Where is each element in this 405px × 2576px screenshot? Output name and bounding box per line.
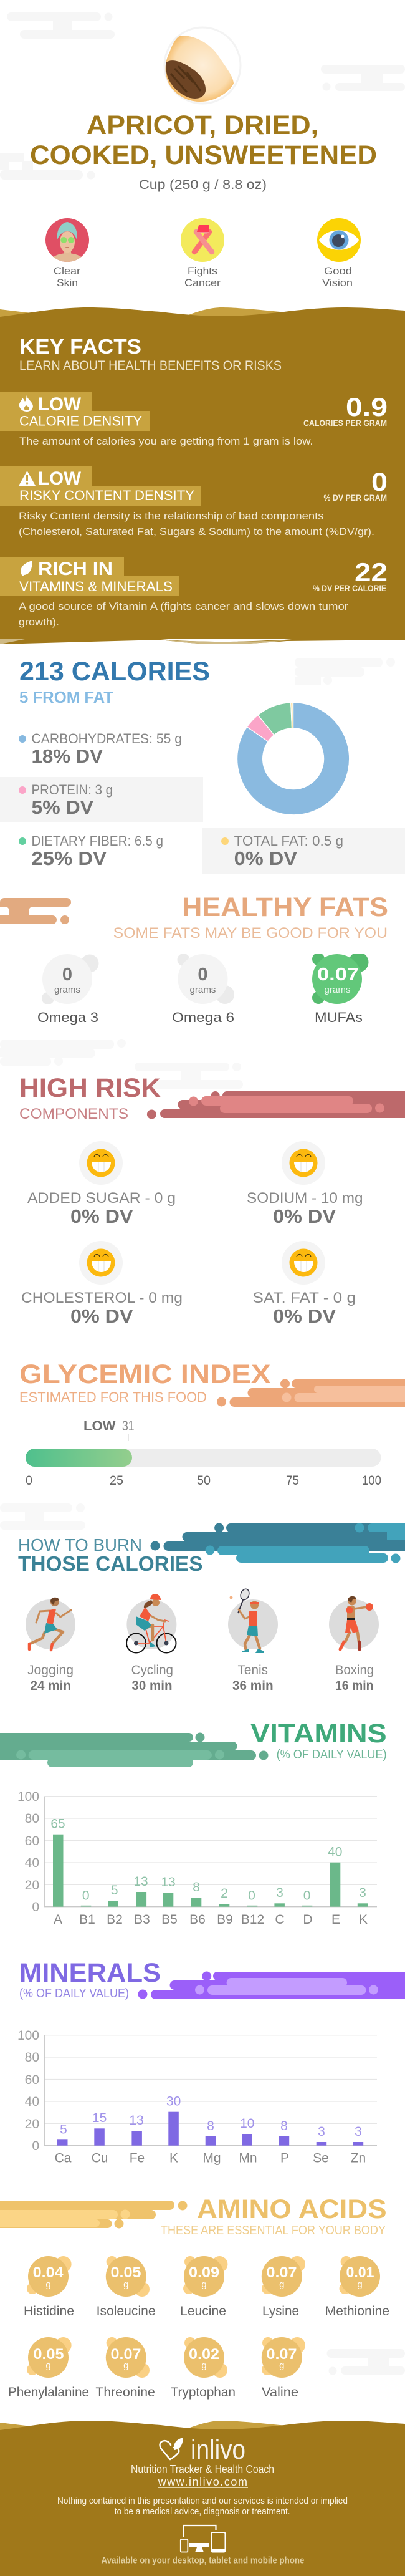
cloud: minerals [138, 1972, 405, 1999]
amino: tryptophan: g [201, 2360, 207, 2371]
heading: how to burn: THOSE CALORIES [18, 1552, 203, 1575]
activity: jogging [26, 1598, 75, 1693]
availability note: Available on your desktop, tablet and mobile phone [101, 2555, 304, 2566]
bar chart: minerals: Mg [202, 2151, 221, 2166]
item: saturated fat: SAT. FAT - 0 g [253, 1290, 356, 1306]
bar chart: vitamins: B9 [217, 1913, 233, 1927]
bar chart: vitamins: 8 [193, 1880, 200, 1894]
amino: phenylalanine: Phenylalanine [8, 2385, 89, 2400]
cloud: vitamins [0, 1732, 268, 1767]
legend: protein [19, 782, 113, 818]
heading: how to burn [18, 1535, 203, 1575]
panel: glycemic index [19, 1359, 405, 1488]
bar chart: vitamins [17, 1790, 377, 1927]
heading: vitamins: VITAMINS [250, 1719, 387, 1749]
amino: leucine: 0.09 [189, 2264, 219, 2281]
heading: healthy fats: HEALTHY FATS [182, 892, 388, 922]
amino: tryptophan: 0.02 [189, 2346, 219, 2363]
heading: calories [19, 657, 210, 707]
amino: methionine: Methionine [325, 2304, 389, 2318]
food photo: dried apricot [164, 27, 241, 104]
panel: high risk [19, 1073, 405, 1327]
item: cholesterol: CHOLESTEROL - 0 mg [21, 1290, 183, 1306]
bar chart: vitamins: 0 [82, 1889, 90, 1903]
bar chart: vitamins: 40 [25, 1856, 39, 1870]
amino: lysine: 0.07 [267, 2264, 297, 2281]
activity: cycling [126, 1594, 176, 1693]
bar chart: vitamins: 0 [32, 1900, 39, 1914]
cloud: healthy fats [0, 898, 72, 924]
bar chart: vitamins: E [331, 1913, 340, 1927]
bar chart: minerals: 20 [25, 2117, 39, 2131]
fact: calorie density: CALORIES PER GRAM [303, 418, 387, 428]
bar chart: vitamins: 80 [25, 1811, 39, 1826]
heading: high risk: COMPONENTS [19, 1106, 128, 1122]
amino: valine: Valine [262, 2385, 298, 2400]
bar chart: vitamins: 5 [111, 1883, 118, 1898]
bar chart: vitamins: B5 [161, 1913, 178, 1927]
item: saturated fat [253, 1241, 356, 1327]
benefit: good vision [317, 218, 361, 289]
amino: threonine [95, 2337, 155, 2400]
donut chart [237, 703, 350, 815]
decorative cloud burn [0, 1503, 85, 1530]
bar chart: minerals: P [280, 2151, 289, 2166]
serving size: Cup (250 g / 8.8 oz) [139, 178, 267, 192]
stat: omega 6: Omega 6 [172, 1010, 234, 1025]
decorative clouds mid [0, 1039, 243, 1089]
tagline: Nutrition Tracker & Health Coach [131, 2463, 274, 2476]
label: tenis: 36 min [232, 1679, 274, 1693]
bar chart: minerals: K [169, 2151, 178, 2166]
bar chart: minerals: Ca [55, 2151, 72, 2166]
fact: vitamins and minerals: A good source of Vitamin A (fights cancer and slows down tumor [19, 601, 348, 612]
amino: phenylalanine: g [45, 2360, 51, 2371]
panel: calories [0, 657, 405, 874]
panel: amino acids [0, 2194, 405, 2400]
bar chart: vitamins: 3 [359, 1886, 366, 1900]
fact: vitamins and minerals: VITAMINS & MINERALS [19, 579, 173, 594]
fact: calorie density: LOW [38, 394, 82, 415]
amino: threonine: g [123, 2360, 128, 2371]
legend: total fat: 0% DV [234, 847, 297, 869]
fact: vitamins and minerals: % DV PER CALORIE [313, 584, 386, 593]
bar chart: vitamins: 60 [25, 1834, 39, 1848]
fact: vitamins and minerals [0, 557, 388, 628]
fact: risky content density: (Cholesterol, Saturated Fat, Sugars & Sodium) to the amount (%DV/gr). [19, 526, 374, 538]
heading: high risk [19, 1073, 161, 1122]
bar chart: minerals: 5 [60, 2123, 67, 2137]
icon: devices [181, 2525, 226, 2552]
label: jogging [27, 1663, 74, 1693]
item: sodium: SODIUM - 10 mg [247, 1190, 363, 1207]
gauge scale: 75 [286, 1474, 299, 1488]
label: boxing: Boxing [335, 1663, 374, 1677]
legend: dietary fiber: DIETARY FIBER: 6.5 g [31, 833, 163, 849]
heading: calories: 5 FROM FAT [19, 688, 113, 707]
bar chart: minerals: 40 [25, 2095, 39, 2109]
gauge scale: 50 [197, 1474, 211, 1488]
bar chart: vitamins: B12 [241, 1913, 264, 1927]
item: cholesterol: 0% DV [70, 1305, 133, 1327]
bar chart: minerals: 8 [207, 2119, 214, 2133]
item: added sugar: ADDED SUGAR - 0 g [27, 1190, 176, 1207]
label: cycling: Cycling [131, 1663, 173, 1677]
fact: risky content density: RISKY CONTENT DENSITY [19, 488, 194, 503]
bar chart: vitamins: 13 [161, 1875, 176, 1889]
bar chart: minerals: Mn [239, 2151, 257, 2166]
benefit: fights cancer: Fights [188, 265, 217, 277]
bar chart: minerals: 30 [166, 2095, 181, 2109]
gauge scale: 100 [362, 1474, 381, 1488]
amino: lysine: Lysine [262, 2304, 299, 2318]
item: saturated fat: 0% DV [273, 1305, 336, 1327]
stat: omega 3: Omega 3 [37, 1010, 98, 1025]
label: boxing [335, 1663, 374, 1693]
label: tenis: Tenis [238, 1663, 268, 1677]
bar chart: minerals: Se [313, 2151, 329, 2166]
amino: valine: g [279, 2360, 284, 2371]
legend: carbohydrates [19, 731, 182, 767]
heading: vitamins: (% OF DAILY VALUE) [277, 1748, 387, 1762]
gauge label: 31 [122, 1418, 135, 1434]
legend: carbohydrates: 18% DV [31, 745, 103, 767]
label: cycling: 30 min [132, 1679, 172, 1693]
heading: key facts: KEY FACTS [19, 335, 141, 358]
heading: glycemic index: GLYCEMIC INDEX [19, 1359, 271, 1389]
stat: MUFAs: 0.07 [317, 965, 359, 985]
stat: omega 3 [37, 954, 98, 1025]
bar chart: vitamins: 0 [303, 1889, 310, 1903]
amino: methionine: 0.01 [346, 2264, 374, 2281]
fact: risky content density: 0 [371, 467, 388, 496]
item: cholesterol [21, 1241, 183, 1327]
label: jogging: Jogging [27, 1663, 74, 1677]
heading: healthy fats: SOME FATS MAY BE GOOD FOR YOU [113, 925, 388, 942]
heading: minerals: (% OF DAILY VALUE) [19, 1987, 129, 2000]
amino: isoleucine [97, 2256, 156, 2318]
macro panels [0, 777, 405, 874]
amino: isoleucine: 0.05 [111, 2264, 141, 2281]
bar chart: vitamins: C [275, 1913, 285, 1927]
amino: histidine: g [45, 2279, 51, 2290]
fact: vitamins and minerals: growth). [19, 616, 59, 628]
bar chart: vitamins: 2 [221, 1886, 228, 1901]
bar chart: vitamins: 0 [248, 1889, 255, 1903]
heading: calories: 213 CALORIES [19, 657, 210, 687]
heading: key facts: LEARN ABOUT HEALTH BENEFITS OR RISKS [19, 359, 282, 373]
amino: leucine: Leucine [180, 2304, 226, 2318]
cloud: high risk [147, 1091, 405, 1119]
amino: histidine: Histidine [24, 2304, 74, 2318]
amino: lysine [262, 2256, 305, 2318]
panel: vitamins [0, 1719, 387, 1927]
bar chart: minerals: 3 [318, 2125, 325, 2139]
heading: minerals [19, 1958, 161, 2000]
gauge scale [26, 1474, 381, 1488]
bar chart: minerals: 80 [25, 2050, 39, 2065]
stat: omega 3: grams [54, 985, 80, 995]
fact: calorie density: 0.9 [346, 392, 388, 422]
amino: methionine [325, 2256, 389, 2318]
heading: how to burn: HOW TO BURN [18, 1535, 142, 1555]
bar chart: vitamins: 20 [25, 1878, 39, 1893]
fact: calorie density: The amount of calories you are getting from 1 gram is low. [19, 435, 313, 447]
gauge label [83, 1418, 135, 1441]
legend: carbohydrates: CARBOHYDRATES: 55 g [31, 731, 182, 746]
amino: lysine: g [279, 2279, 284, 2290]
gauge label: LOW [83, 1418, 116, 1434]
item: sodium [247, 1141, 363, 1227]
legend: total fat [221, 833, 343, 869]
amino: isoleucine: g [123, 2279, 128, 2290]
stat: MUFAs: grams [324, 985, 350, 995]
decorative cloud amino [326, 2349, 405, 2375]
bar chart: vitamins: 13 [133, 1874, 148, 1889]
heading: glycemic index: ESTIMATED FOR THIS FOOD [19, 1389, 207, 1405]
stat: omega 3: 0 [62, 965, 72, 985]
heading: vitamins [250, 1719, 387, 1762]
fact: risky content density: LOW [38, 468, 82, 489]
heading: minerals: MINERALS [19, 1958, 161, 1988]
bar chart: vitamins: 40 [328, 1845, 342, 1860]
amino: histidine [24, 2256, 74, 2318]
disclaimer: Nothing contained in this presentation and our services is intended or implied [57, 2496, 348, 2506]
stat: omega 6: grams [189, 985, 216, 995]
amino: threonine: Threonine [95, 2385, 155, 2400]
amino: phenylalanine [8, 2337, 89, 2400]
heading: amino acids [161, 2194, 387, 2237]
bar chart: vitamins: B2 [107, 1913, 123, 1927]
bar chart: vitamins: B6 [189, 1913, 206, 1927]
cloud: glycemic index [217, 1379, 405, 1407]
item: sodium: 0% DV [273, 1205, 336, 1227]
bar chart: minerals: 10 [240, 2116, 254, 2131]
legend: protein: 5% DV [31, 796, 93, 818]
benefit: clear skin [45, 218, 89, 289]
stat: omega 6: 0 [198, 965, 208, 985]
item: added sugar: 0% DV [70, 1205, 133, 1227]
title: COOKED, UNSWEETENED [30, 140, 377, 170]
fact: risky content density: % DV PER GRAM [324, 493, 387, 503]
legend: dietary fiber: 25% DV [31, 847, 107, 869]
stat: MUFAs: MUFAs [315, 1010, 363, 1025]
bar chart: vitamins: 3 [276, 1886, 284, 1900]
benefit: clear skin: Clear [54, 265, 80, 277]
title: APRICOT, DRIED, [87, 110, 318, 140]
bar chart: vitamins: A [54, 1913, 62, 1927]
amino: tryptophan: Tryptophan [171, 2385, 236, 2400]
disclaimer: to be a medical advice, diagnosis or treatment. [115, 2506, 290, 2517]
fact: vitamins and minerals: 22 [355, 557, 388, 587]
bar chart: minerals: 100 [17, 2028, 39, 2043]
logo: inlivo [160, 2434, 245, 2465]
amino: valine [262, 2337, 305, 2400]
disclaimer [57, 2496, 348, 2517]
amino: histidine: 0.04 [33, 2264, 64, 2281]
decorative clouds header [0, 12, 405, 180]
label: jogging: 24 min [30, 1679, 71, 1693]
label: tenis [232, 1663, 274, 1693]
stat: MUFAs [312, 952, 369, 1025]
bar chart: minerals: 3 [355, 2125, 362, 2139]
gauge scale: 0 [26, 1474, 32, 1488]
bar chart: minerals: Zn [351, 2151, 366, 2166]
bar chart: minerals: Cu [92, 2151, 108, 2166]
bar chart: minerals: 60 [25, 2073, 39, 2087]
bar chart: minerals [17, 2028, 377, 2166]
legend: protein: PROTEIN: 3 g [31, 782, 113, 798]
bar chart: vitamins: B1 [79, 1913, 95, 1927]
cloud: amino acids [0, 2201, 187, 2229]
amino: tryptophan [171, 2337, 236, 2400]
label: boxing: 16 min [335, 1679, 374, 1693]
heading: key facts [19, 335, 282, 373]
benefit: good vision: Vision [322, 277, 353, 289]
heading: healthy fats [113, 892, 388, 942]
logo: inlivo: inlivo [191, 2434, 245, 2465]
item: added sugar [27, 1141, 176, 1227]
panel: healthy fats [0, 892, 388, 1025]
bar chart: minerals: 13 [129, 2113, 144, 2128]
bar chart: vitamins: 100 [17, 1790, 39, 1804]
website link: www.inlivo.com [158, 2476, 247, 2488]
heading: glycemic index [19, 1359, 271, 1405]
benefit: good vision: Good [324, 265, 352, 277]
stat: omega 6 [172, 953, 234, 1025]
benefit: clear skin: Skin [57, 277, 78, 289]
fact: calorie density: CALORIE DENSITY [19, 413, 142, 429]
amino: leucine: g [201, 2279, 207, 2290]
amino: phenylalanine: 0.05 [34, 2346, 64, 2363]
fact: risky content density: Risky Content density is the relationship of bad components [19, 510, 324, 522]
benefit: fights cancer [181, 218, 224, 289]
bar chart: vitamins: K [359, 1913, 368, 1927]
cloud: burn [151, 1523, 405, 1563]
panel: footer [0, 2421, 405, 2576]
bar chart: vitamins: 65 [50, 1817, 65, 1831]
bar chart: minerals: 15 [92, 2111, 107, 2125]
legend: dietary fiber [19, 833, 163, 869]
title [30, 110, 377, 170]
amino: isoleucine: Isoleucine [97, 2304, 156, 2318]
benefit: fights cancer: Cancer [184, 277, 221, 289]
legend: total fat: TOTAL FAT: 0.5 g [234, 833, 343, 849]
bar chart: vitamins: D [303, 1913, 313, 1927]
fact: vitamins and minerals: RICH IN [38, 559, 113, 579]
heading: amino acids: THESE ARE ESSENTIAL FOR YOUR BODY [161, 2224, 386, 2237]
fact: risky content density [0, 466, 388, 538]
gauge bar [26, 1449, 381, 1467]
heading: high risk: HIGH RISK [19, 1073, 161, 1103]
amino: valine: 0.07 [267, 2346, 297, 2363]
amino: threonine: 0.07 [111, 2346, 141, 2363]
amino: leucine [180, 2256, 227, 2318]
bar chart: minerals: 0 [32, 2139, 39, 2153]
heading: amino acids: AMINO ACIDS [197, 2194, 387, 2224]
gauge scale: 25 [110, 1474, 123, 1488]
panel: how to burn calories [18, 1523, 405, 1693]
activity: boxing [329, 1596, 379, 1693]
label: cycling [131, 1663, 173, 1693]
bar chart: minerals: Fe [130, 2151, 145, 2166]
activity: tennis [228, 1588, 278, 1693]
bar chart: minerals: 8 [280, 2119, 288, 2133]
panel: key facts [0, 307, 405, 644]
fact: calorie density [0, 392, 388, 447]
bar chart: vitamins: B3 [134, 1913, 150, 1927]
panel: minerals [17, 1958, 405, 2166]
amino: methionine: g [357, 2279, 363, 2290]
